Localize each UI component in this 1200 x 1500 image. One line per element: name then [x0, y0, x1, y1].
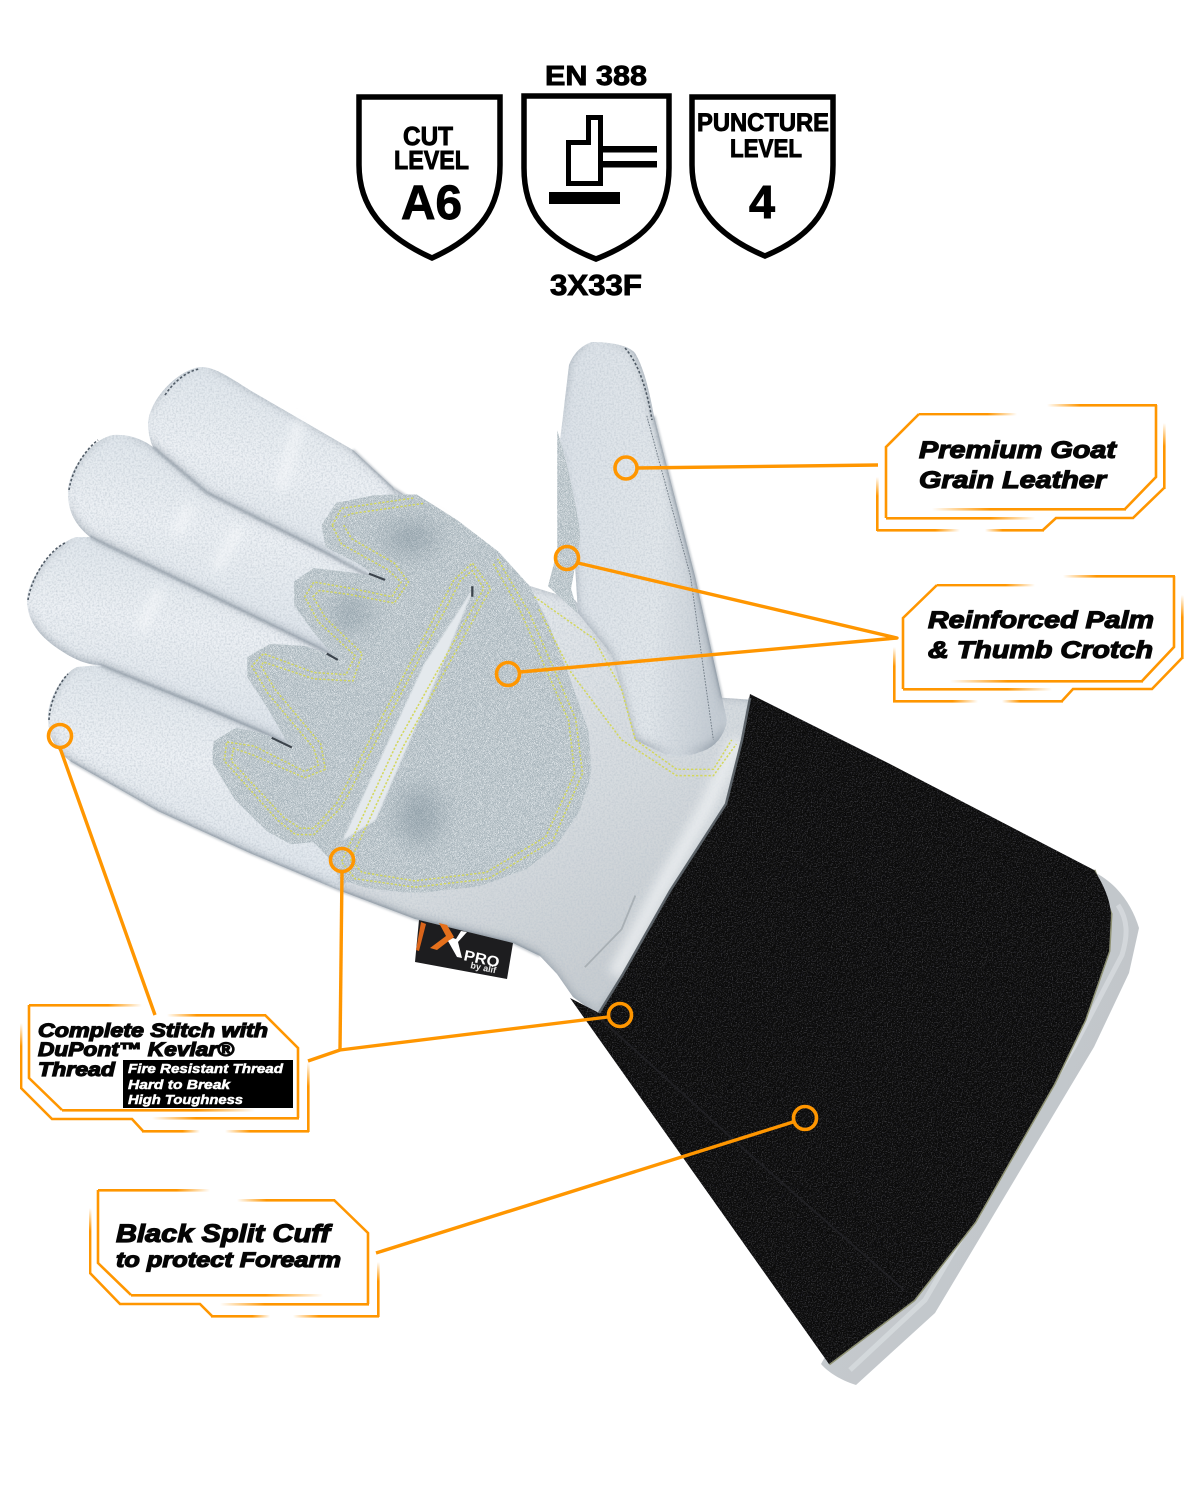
middle finger — [68, 435, 390, 657]
callout text: to protect Forearm — [116, 1249, 341, 1272]
little finger — [48, 665, 390, 891]
tag logo white stroke — [448, 931, 467, 958]
badge: EN 388 hammer mechanical risk pictogram — [524, 96, 669, 259]
connector: black cuff — [376, 1106, 816, 1253]
suede dark blotches — [332, 521, 442, 845]
connector: fingertip stitch — [48, 724, 155, 1015]
palm and wrist leather — [70, 487, 770, 1015]
callout text: DuPont™ Kevlar® — [38, 1040, 234, 1061]
callout text: Thread — [38, 1060, 115, 1081]
black split cuff — [570, 694, 1139, 1385]
palm suede — [213, 495, 590, 892]
black feature box — [123, 1060, 293, 1108]
thumb panel stitching — [534, 597, 732, 769]
badge: puncture level 4 — [692, 97, 833, 256]
glove photo illustration — [27, 342, 1139, 1385]
heading: EN 388: EN 388 — [545, 60, 647, 91]
badge: puncture level 4: LEVEL — [730, 135, 802, 163]
badge: cut level A6: LEVEL — [394, 145, 469, 175]
thumb seam — [647, 416, 713, 740]
callout text: Grain Leather — [919, 467, 1108, 494]
callout text — [919, 437, 1117, 494]
callout: complete stitch with DuPont Kevlar thread — [20, 1004, 310, 1133]
callout text: Complete Stitch with — [38, 1021, 268, 1042]
callout text — [928, 607, 1154, 664]
cuff fold — [591, 1010, 904, 1290]
thumb — [560, 342, 727, 756]
badge: puncture level 4: 4 — [749, 176, 775, 228]
Xpro brand tag — [415, 920, 513, 979]
index finger — [148, 367, 420, 600]
yellow Kevlar stitching on fingers and palm — [224, 498, 736, 887]
suede reinforcement patch — [213, 416, 736, 967]
callout text: & Thumb Crotch — [928, 637, 1153, 664]
tag logo orange chevron — [430, 923, 454, 950]
thumb crotch suede — [548, 430, 580, 614]
tag logo text: PRO — [462, 947, 501, 971]
callout: reinforced palm and thumb crotch — [893, 575, 1184, 703]
ring finger — [27, 537, 350, 743]
palm crease — [342, 586, 475, 841]
black feature box: Fire Resistant Thread — [128, 1061, 284, 1076]
badge: cut level A6 — [359, 97, 500, 258]
connector: thumb crotch and palm — [496, 546, 897, 686]
callout: premium goat grain leather — [876, 404, 1166, 532]
leather hand — [27, 342, 770, 1015]
connector: thumb leather — [615, 457, 878, 479]
badge: cut level A6: A6 — [401, 177, 462, 230]
certification badges — [359, 60, 833, 302]
finger creases — [140, 420, 300, 630]
connector: palm stitch and cuff stitch — [308, 848, 632, 1061]
fingertip seam stitches — [28, 348, 652, 720]
callout text — [116, 1220, 341, 1272]
crease slits — [272, 574, 472, 747]
callout text: Premium Goat — [919, 437, 1117, 464]
code: 3X33F: 3X33F — [550, 270, 642, 302]
callout text — [38, 1021, 268, 1081]
callout text: Black Split Cuff — [116, 1220, 333, 1248]
black feature box: High Toughness — [128, 1092, 243, 1107]
tag orange edge — [416, 922, 426, 951]
badge: cut level A6: CUT — [403, 121, 453, 151]
cuff grey hem — [821, 870, 1139, 1385]
callout: black split cuff — [89, 1189, 380, 1318]
badge: puncture level 4: PUNCTURE — [697, 109, 829, 137]
cuff inner edge — [599, 698, 750, 1013]
wrist highlight — [615, 740, 738, 975]
tag subtext: by alif — [470, 960, 498, 976]
callout text: Reinforced Palm — [928, 607, 1154, 634]
finger separation shadows — [70, 416, 722, 956]
wrist fold — [585, 896, 635, 967]
black feature box: Hard to Break — [128, 1077, 231, 1092]
